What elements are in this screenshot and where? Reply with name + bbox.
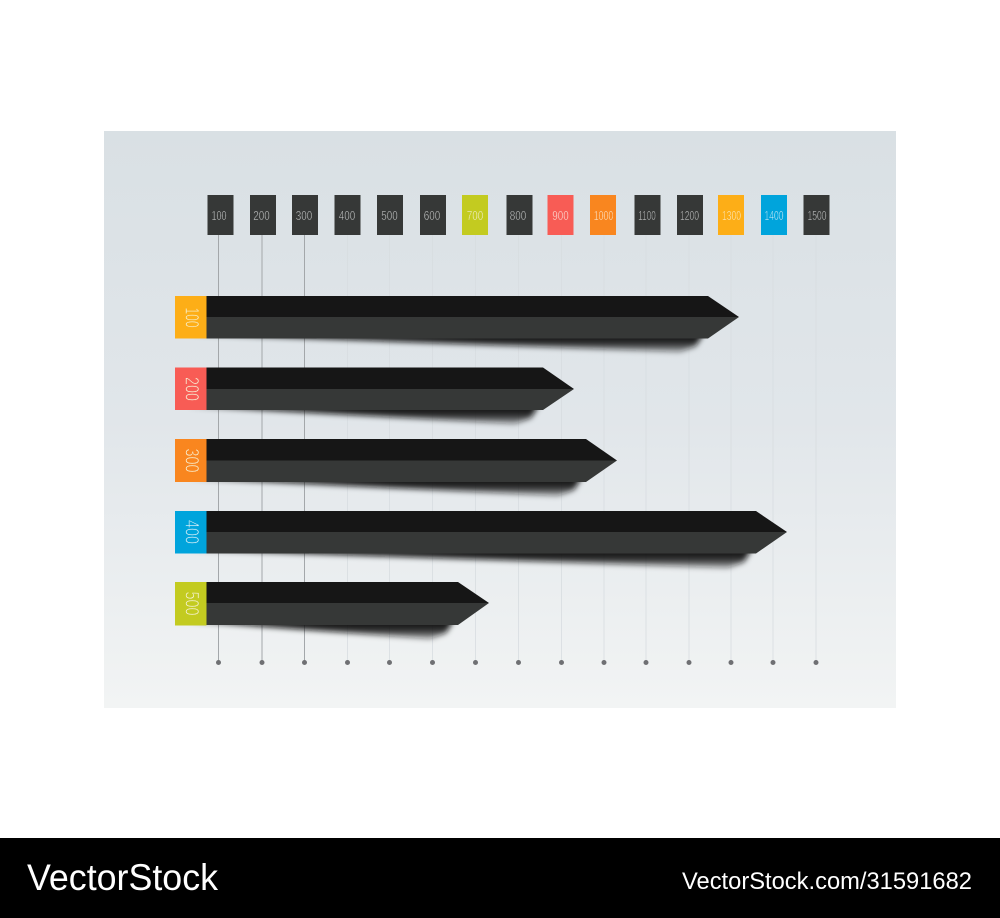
bar 5: value 500: 500: [180, 592, 202, 616]
scale tabs: 1200: [680, 208, 699, 223]
panel: chart background: [104, 131, 896, 708]
scale tabs: 1100: [638, 208, 656, 223]
scale tabs: [208, 195, 830, 235]
bar 1: value 100: 100: [180, 308, 202, 328]
bar 5: value 500: [175, 582, 489, 639]
scale tabs: 900: [552, 208, 569, 223]
scale tabs: 200: [253, 208, 270, 223]
scale tabs: 800: [510, 208, 526, 223]
brand wordmark: VectorStock: [27, 857, 218, 898]
axis end dots: [216, 660, 818, 665]
bar 3: value 300: [175, 439, 617, 496]
scale tabs: 1400: [764, 208, 784, 223]
bar 4: value 400: [175, 511, 787, 568]
scale tabs: 400: [339, 208, 355, 223]
scale tabs: 1500: [808, 208, 826, 223]
scale tabs: 600: [424, 208, 440, 223]
scale tabs: 500: [381, 208, 398, 223]
footer band: [0, 838, 1000, 918]
bar 2: value 200: 200: [180, 377, 202, 401]
bar 3: value 300: 300: [180, 448, 202, 472]
scale tabs: 700: [467, 208, 483, 223]
scale tabs: 1000: [594, 208, 613, 223]
vertical grid lines: [218, 235, 816, 662]
bar 4: value 400: 400: [180, 520, 202, 544]
bar 2: value 200: [175, 368, 574, 424]
scale tabs: 1300: [722, 208, 741, 223]
bar 1: value 100: [175, 296, 739, 352]
scale tabs: 300: [296, 208, 312, 223]
image reference: VectorStock.com/31591682: [682, 868, 972, 895]
scale tabs: 100: [212, 208, 226, 223]
